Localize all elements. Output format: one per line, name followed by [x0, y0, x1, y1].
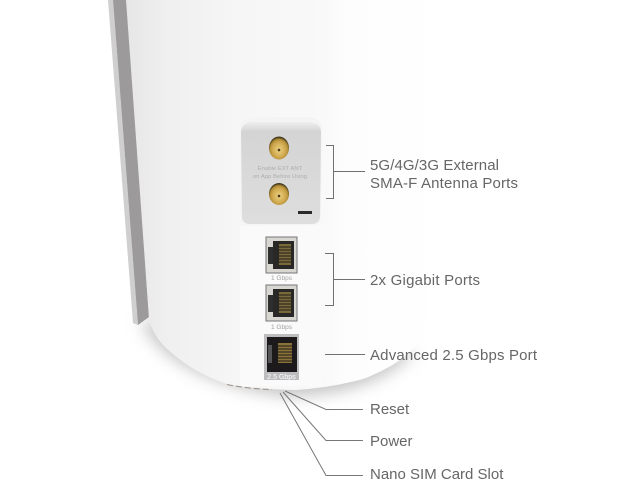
leader: power	[283, 392, 363, 440]
port column	[240, 226, 321, 386]
slot mark	[298, 211, 312, 214]
label: gigabit ports: 2x Gigabit Ports	[370, 272, 480, 289]
label: power: Power	[370, 433, 413, 450]
label: antenna ports: 5G/4G/3G External	[370, 157, 499, 174]
panel note: on App Before Using	[253, 174, 307, 180]
leader: 2.5 Gbps port	[325, 354, 365, 356]
bracket: gigabit ports	[325, 254, 365, 306]
connector: top SMA	[269, 136, 289, 160]
base edge	[227, 384, 272, 390]
panel note	[253, 166, 307, 180]
ground shadow	[140, 320, 415, 396]
antenna port panel	[240, 117, 322, 225]
port: 1 Gbps bottom: 1 Gbps	[271, 324, 293, 331]
port: 1 Gbps bottom	[266, 285, 297, 331]
port: 2.5 Gbps	[264, 334, 299, 381]
leader: SIM slot	[280, 393, 363, 476]
port: 1 Gbps top: 1 Gbps	[271, 275, 293, 282]
leader: reset	[285, 391, 363, 410]
antenna blade	[108, 0, 149, 325]
connector: bottom SMA	[269, 183, 289, 205]
port: 2.5 Gbps: 2.5 Gbps	[267, 374, 296, 381]
port: 1 Gbps top	[266, 237, 297, 282]
panel note: Enable EXT ANT	[258, 166, 303, 172]
label: reset: Reset	[370, 401, 410, 418]
bracket: antenna ports	[326, 146, 365, 198]
label: antenna ports	[370, 157, 518, 192]
router body	[126, 0, 448, 390]
label: 2.5 Gbps port: Advanced 2.5 Gbps Port	[370, 347, 538, 364]
label: antenna ports: SMA-F Antenna Ports	[370, 175, 518, 192]
